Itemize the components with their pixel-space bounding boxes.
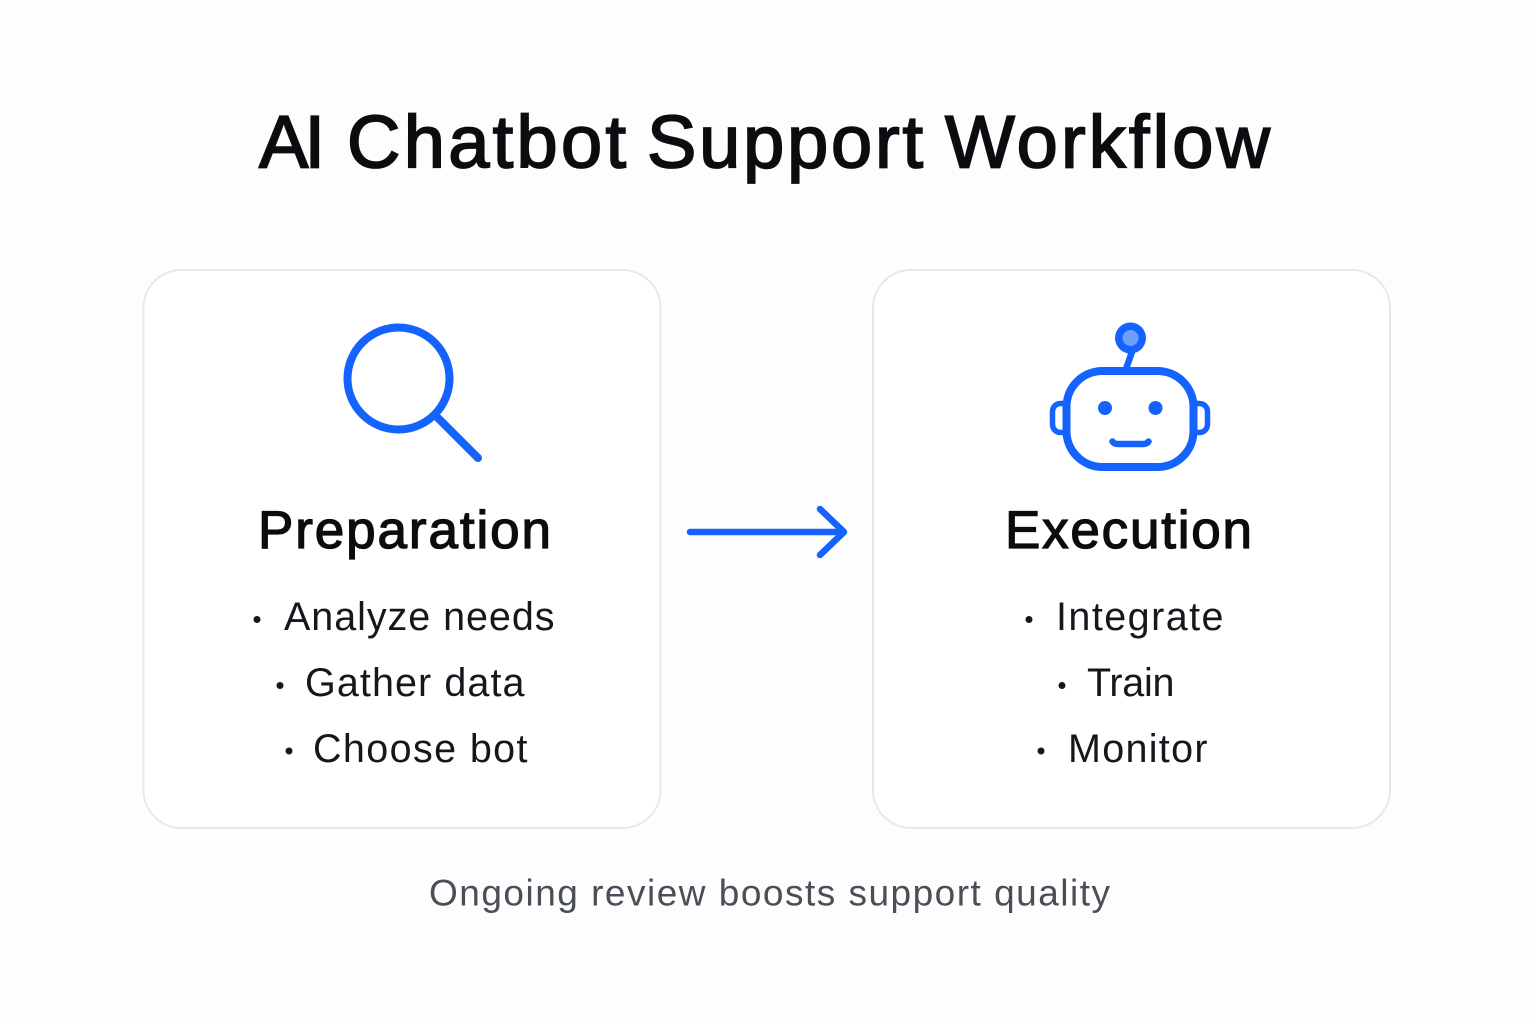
list: execution steps: Monitor [1068,727,1208,771]
list: execution steps [1026,595,1224,771]
icon: robot [1052,322,1208,467]
arrow [690,509,844,555]
title: AI [259,100,325,184]
list: execution steps: Integrate [1056,595,1224,639]
heading: preparation: Preparation [258,501,551,560]
panel: execution [873,270,1390,828]
title: Workflow [945,100,1271,184]
list: preparation steps: Analyze needs [284,595,554,639]
list: preparation steps: Gather data [305,661,525,705]
title: Support [647,100,923,184]
footer caption: Ongoing review boosts support quality [429,872,1110,914]
panel: preparation [144,270,660,828]
list: preparation steps [254,595,554,771]
list: execution steps: Train [1087,661,1174,705]
list: preparation steps: Choose bot [313,727,528,771]
heading: execution: Execution [1005,501,1252,560]
icon: magnifying glass [348,328,478,458]
title: Chatbot [347,100,626,184]
